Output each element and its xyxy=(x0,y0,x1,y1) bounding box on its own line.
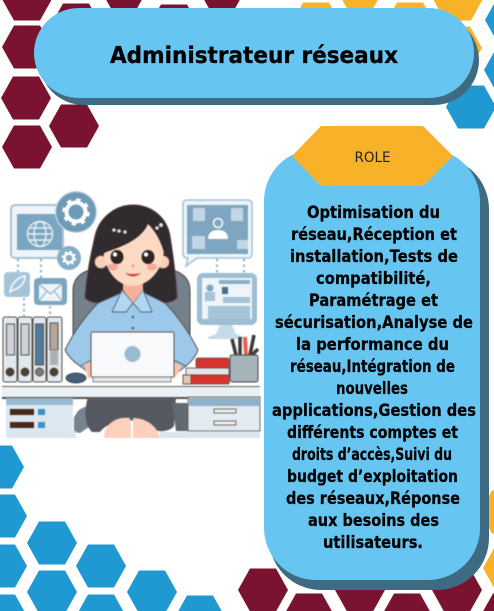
role description text xyxy=(272,203,476,552)
role description text: sécurisation,Analyse de xyxy=(275,313,473,332)
icon: network monitor with globe xyxy=(11,205,63,258)
chair xyxy=(73,270,190,345)
role description text: compatibilité, xyxy=(316,269,431,288)
role description text: installation,Tests de xyxy=(290,247,458,266)
role description text: réseau,Intégration de xyxy=(290,357,455,376)
role description text: budget d’exploitation xyxy=(287,467,458,486)
orange hexagons: top right xyxy=(291,0,483,70)
character: neck and head xyxy=(94,207,170,303)
role description text: Optimisation du xyxy=(307,203,440,222)
role description text: la performance du xyxy=(296,335,449,354)
role badge: ROLE xyxy=(354,150,390,166)
left drawer unit xyxy=(6,398,73,438)
icon: envelope tile xyxy=(34,278,67,305)
role description text: différents comptes et xyxy=(287,423,458,442)
panel: role xyxy=(264,126,489,590)
dotted connectors xyxy=(18,259,244,316)
role badge xyxy=(292,126,453,186)
icon: large gear xyxy=(56,192,96,232)
illustration: network administrator at desk xyxy=(2,192,260,438)
character: hands xyxy=(84,362,182,378)
maroon hexagons: bottom right xyxy=(238,568,494,611)
desk xyxy=(2,386,260,438)
skirt and legs xyxy=(74,397,190,438)
character: shirt xyxy=(65,290,198,376)
role description text: Paramétrage et xyxy=(309,291,438,310)
icon: small desktop monitor xyxy=(197,273,257,339)
books xyxy=(183,358,229,384)
orange hexagons: bottom right xyxy=(480,490,494,590)
title: Administrateur réseaux xyxy=(110,41,398,69)
icon: profile speech bubble xyxy=(183,200,252,266)
role description text: utilisateurs. xyxy=(323,533,423,552)
character: hair back xyxy=(85,205,177,303)
pen cup xyxy=(230,335,258,382)
icon: small gear xyxy=(57,246,81,270)
icon: feather tile xyxy=(4,272,30,297)
maroon hexagons: top left xyxy=(1,0,247,168)
laptop xyxy=(91,332,174,382)
title banner xyxy=(34,8,479,105)
right drawer unit xyxy=(160,397,260,438)
mouse xyxy=(66,373,86,383)
role description text: aux besoins des xyxy=(308,511,439,530)
blue hexagons: top right xyxy=(446,0,494,128)
role description text: des réseaux,Réponse xyxy=(286,489,460,508)
binders xyxy=(3,317,62,382)
blue hexagons: bottom left xyxy=(0,446,225,611)
role description text: nouvelles xyxy=(336,379,408,398)
role description text: réseau,Réception et xyxy=(291,225,457,244)
